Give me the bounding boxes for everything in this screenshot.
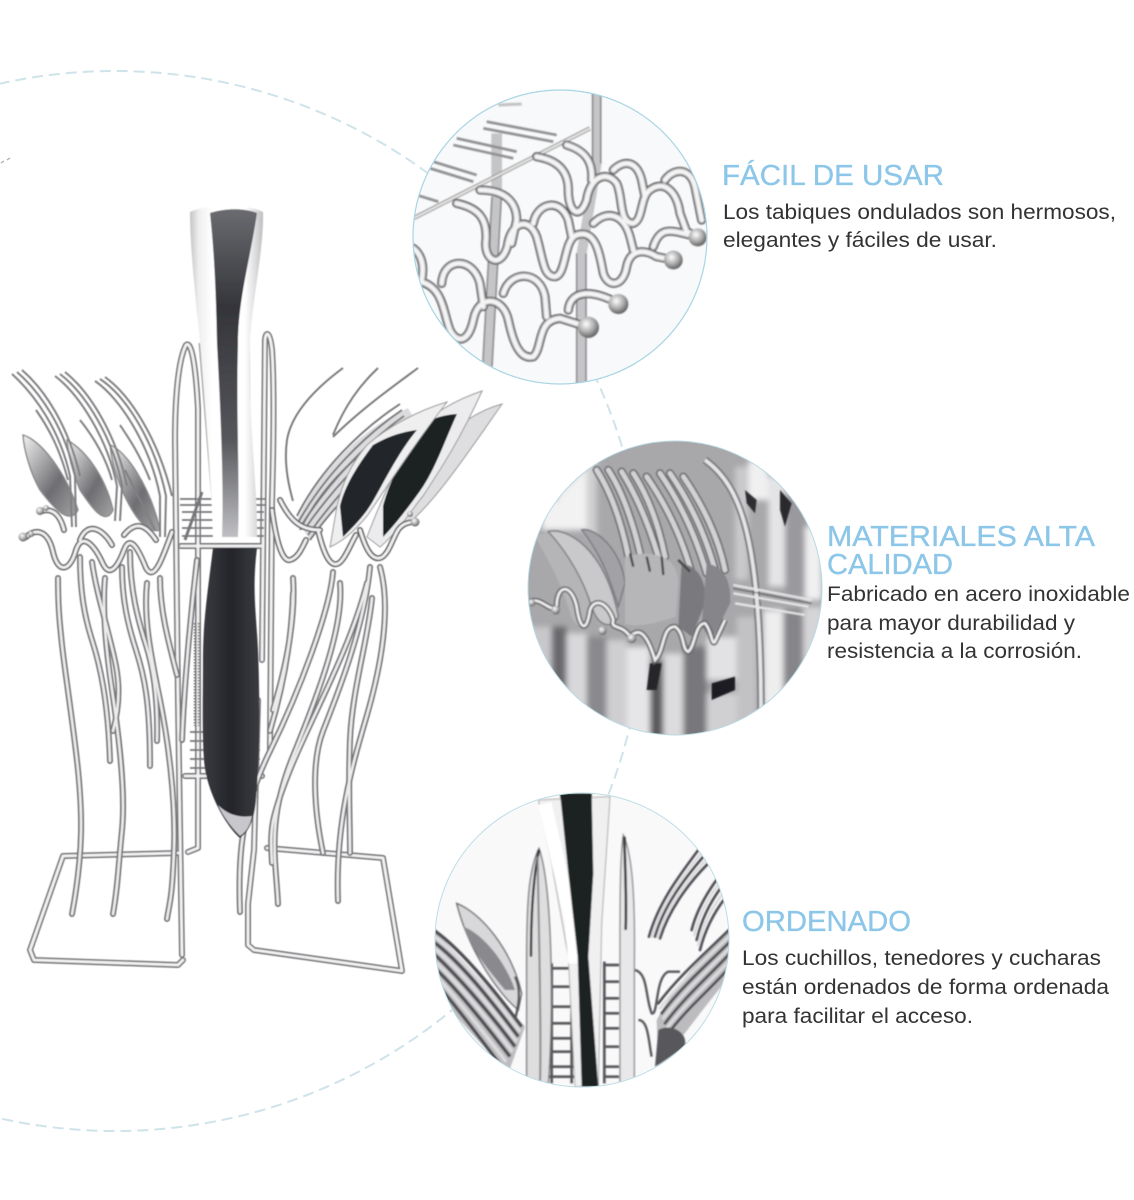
fork and spoon stems (58, 552, 385, 919)
heading: Fácil de usar: FÁCIL DE USAR (722, 159, 944, 192)
heading: Ordenado: ORDENADO (742, 906, 911, 938)
ladders (548, 960, 620, 1084)
knife handle (538, 797, 610, 1087)
description: Fácil de usar (723, 201, 1116, 252)
fork heads (678, 563, 705, 637)
dashed connector arc (0, 71, 645, 1131)
description: Materiales alta calidad: resistencia a la corrosión. (827, 640, 1082, 663)
description: Ordenado: están ordenados de forma ordenada (742, 976, 1109, 999)
dark reflections (712, 677, 735, 700)
description: Ordenado: para facilitar el acceso. (742, 1005, 973, 1028)
rack bars (733, 585, 812, 615)
product photo: cutlery rack (12, 206, 502, 971)
description: Ordenado: Los cuchillos, tenedores y cucharas (742, 947, 1101, 970)
right spoon heads (330, 391, 502, 547)
rack bars (417, 122, 557, 202)
left spoon (457, 903, 522, 1010)
heading: Materiales alta calidad (827, 521, 1096, 581)
dark reflection right (655, 1027, 685, 1067)
right fork stripes (657, 930, 730, 1067)
description: Materiales alta calidad: Fabricado en acero inoxidable (827, 583, 1130, 606)
long arch (705, 460, 761, 723)
wave rail (530, 589, 725, 660)
fork tines (597, 470, 725, 573)
left spoon heads (23, 435, 160, 531)
description: Fácil de usar: Los tabiques ondulados son hermosos, (723, 201, 1116, 224)
rack bars (180, 323, 265, 768)
heading: Materiales alta calidad: MATERIALES ALTA (827, 521, 1096, 553)
rail end balls (18, 505, 420, 542)
description: Materiales alta calidad: para mayor durabilidad y (827, 612, 1076, 635)
left spoons (535, 534, 590, 626)
right arch (620, 835, 634, 1083)
description: Ordenado (742, 947, 1109, 1028)
left fork heads (12, 370, 172, 537)
description: Materiales alta calidad (827, 583, 1130, 663)
large knife (190, 206, 263, 838)
left fork stripes (436, 934, 526, 1068)
diagonal wire (413, 128, 590, 218)
blurred tonal base (528, 460, 823, 747)
base frame and arches (30, 334, 402, 971)
left arch (527, 848, 551, 1083)
detail circle: wavy dividers (413, 90, 707, 390)
detail circle: organised cutlery (432, 793, 730, 1087)
balls (578, 228, 707, 338)
detail circle: stainless steel cutlery (528, 441, 823, 747)
wave rail (26, 500, 415, 572)
description: Fácil de usar: elegantes y fáciles de usar. (723, 229, 997, 252)
wave wires (515, 970, 680, 1057)
small stray dashes (1, 158, 10, 163)
spring (195, 623, 199, 726)
right fork heads (297, 408, 418, 540)
heading: Materiales alta calidad: CALIDAD (827, 549, 953, 581)
poles (487, 90, 597, 390)
